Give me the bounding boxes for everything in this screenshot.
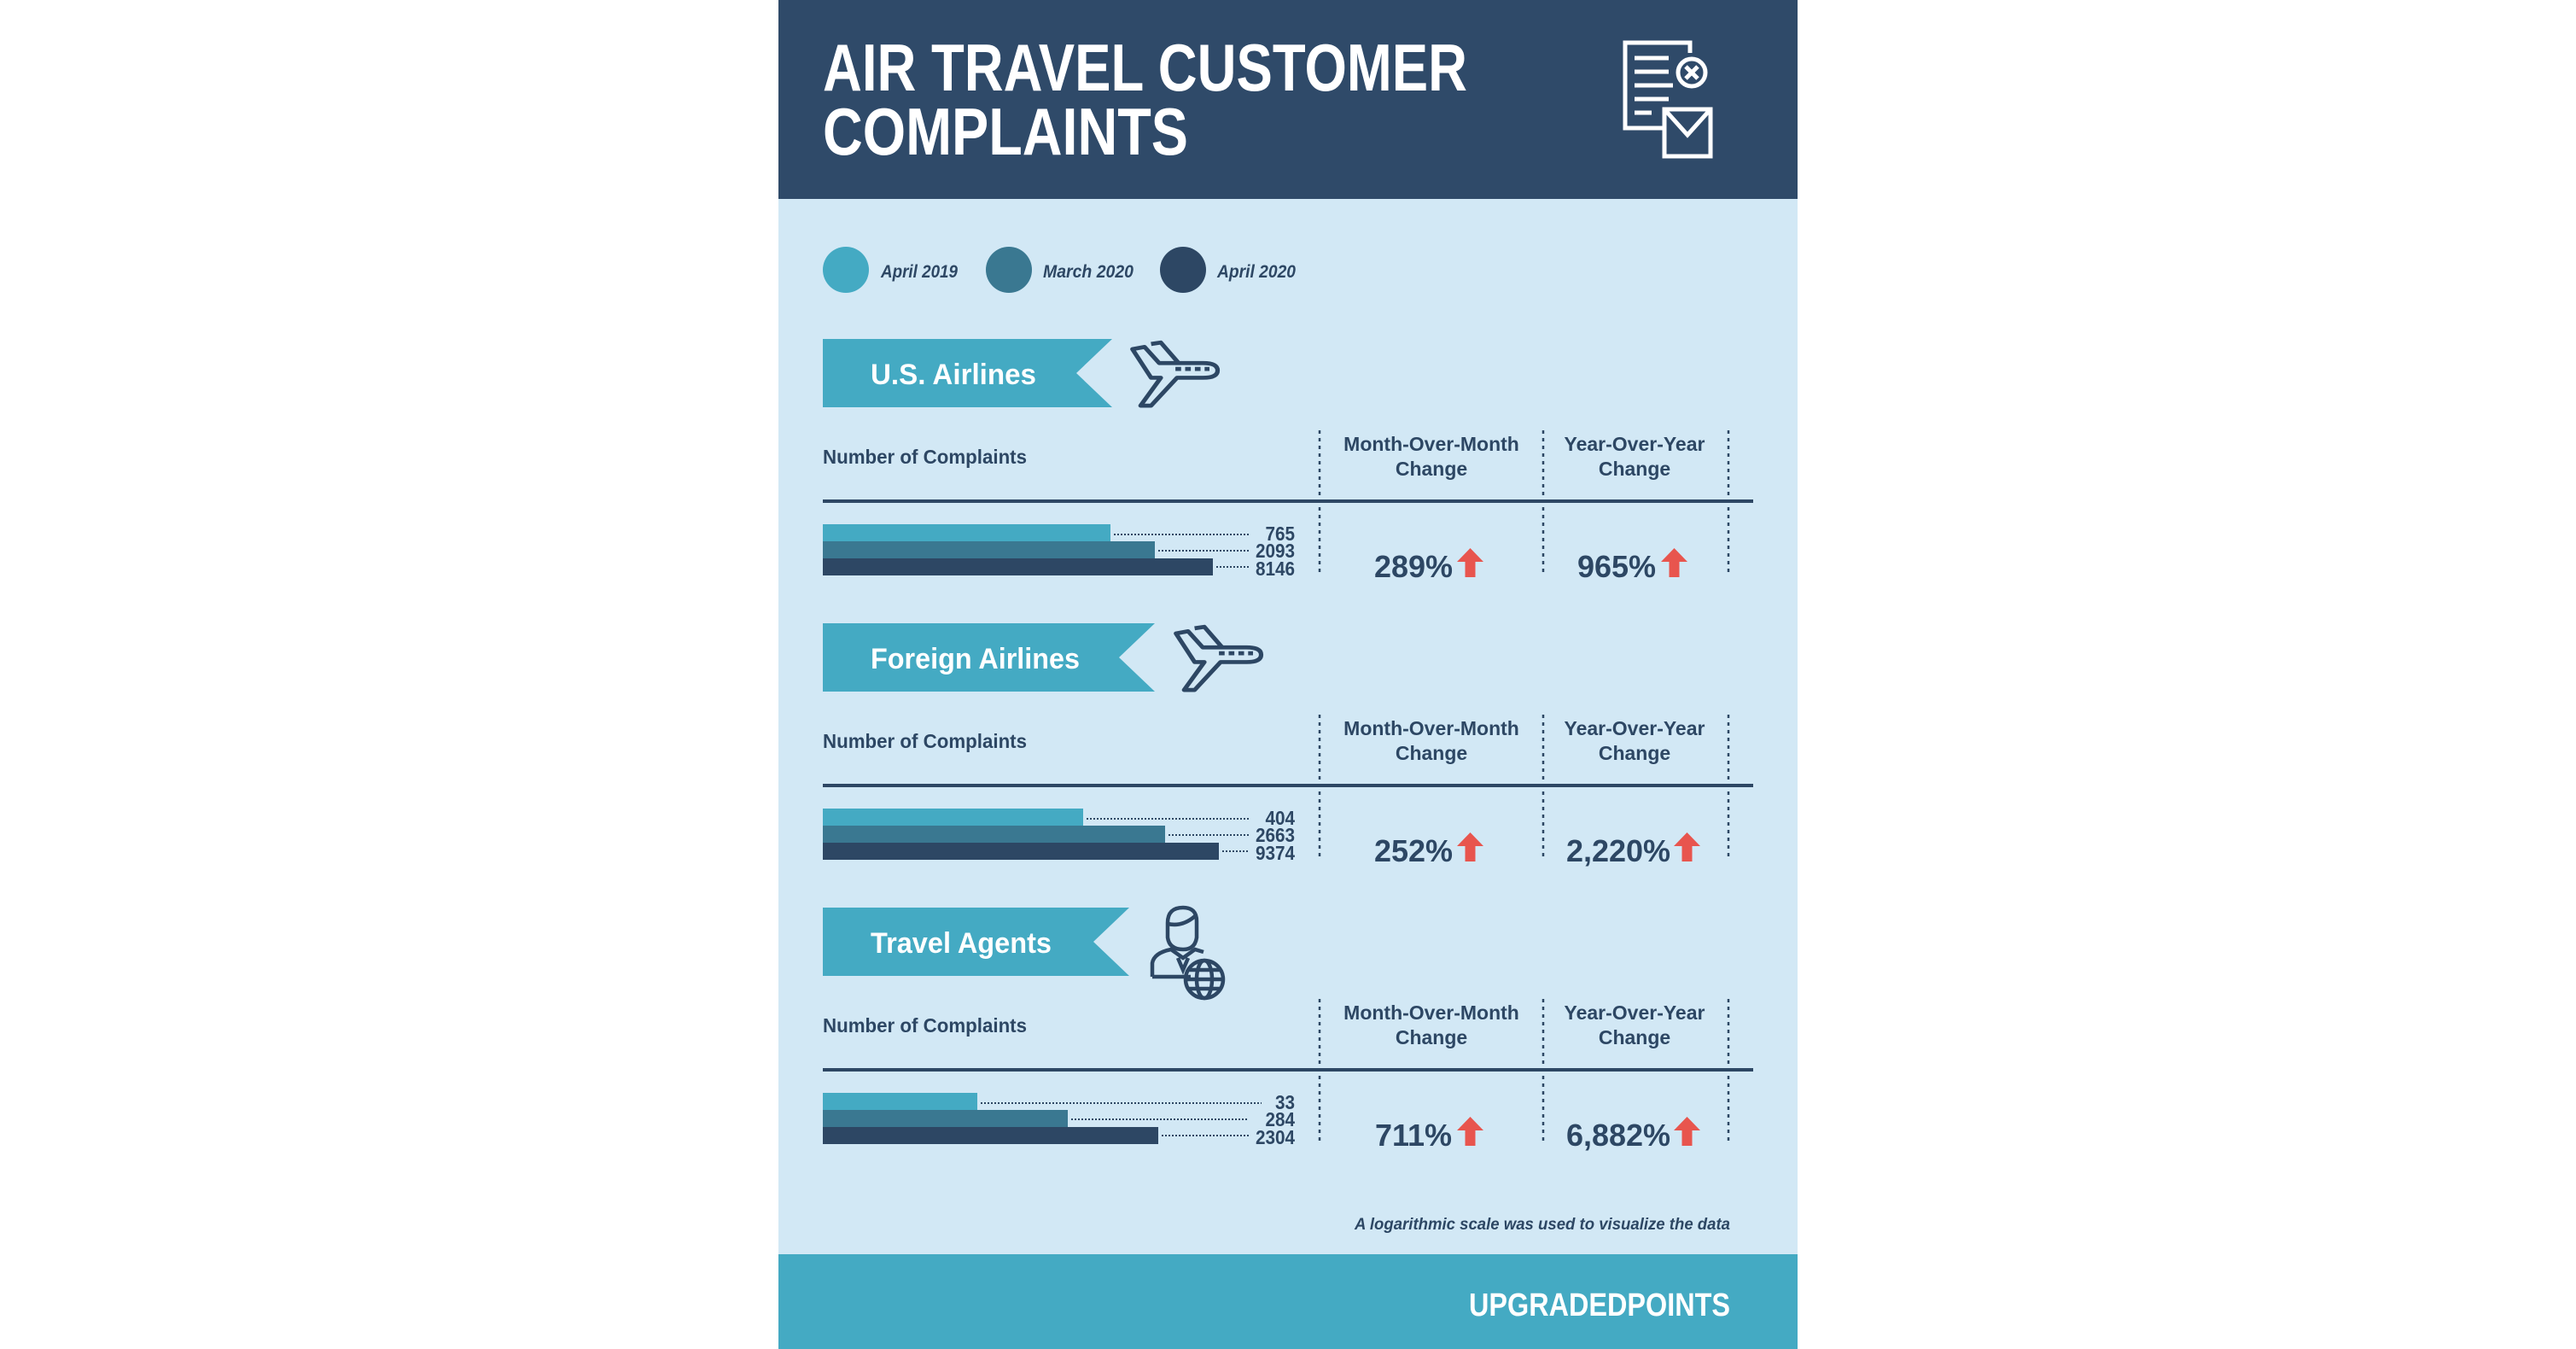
- table headers: Year-Over-Year: [1565, 717, 1705, 739]
- icon: agent with globe: [1152, 908, 1223, 998]
- banner: Foreign Airlines: [871, 643, 1080, 675]
- bar chart: 2663: [1256, 824, 1295, 846]
- table headers: Year-Over-Year: [1565, 1002, 1705, 1024]
- table headers: Month-Over-Month: [1343, 433, 1519, 455]
- table headers: Number of Complaints: [823, 446, 1027, 468]
- table headers: Number of Complaints: [823, 730, 1027, 752]
- bar chart: 765: [1265, 523, 1295, 545]
- background panel: [778, 0, 1798, 1349]
- title: COMPLAINTS: [823, 94, 1188, 169]
- panel: Travel Agents: [823, 908, 1753, 1153]
- footnote: A logarithmic scale was used to visualize the data: [1354, 1216, 1730, 1234]
- table headers: Change: [1396, 742, 1467, 764]
- bar chart: 8146: [1256, 558, 1295, 580]
- bar chart: [823, 807, 1296, 864]
- bar chart: 2304: [1256, 1126, 1296, 1148]
- legend: March 2020: [1043, 262, 1134, 282]
- table headers: [823, 433, 1705, 480]
- banner: [823, 908, 1129, 976]
- table headers: Change: [1396, 1026, 1467, 1048]
- table headers: Change: [1396, 458, 1467, 480]
- table headers: Change: [1599, 1026, 1670, 1048]
- bar chart: 9374: [1256, 842, 1296, 864]
- table headers: Change: [1599, 458, 1670, 480]
- icon: complaint document: [1625, 43, 1711, 156]
- table headers: Month-Over-Month: [1343, 1002, 1519, 1024]
- icon: plane: [1133, 342, 1217, 406]
- footer: [778, 1254, 1798, 1349]
- table headers: Year-Over-Year: [1565, 433, 1705, 455]
- footer: UPGRADEDPOINTS: [1469, 1288, 1730, 1323]
- table headers: Number of Complaints: [823, 1014, 1027, 1037]
- stats: [1374, 832, 1700, 868]
- panel: Foreign Airlines: [823, 623, 1753, 868]
- bar chart: 33: [1275, 1091, 1295, 1113]
- table headers: Month-Over-Month: [1343, 717, 1519, 739]
- banner: Travel Agents: [871, 927, 1052, 960]
- bar chart: [823, 523, 1295, 580]
- stats: 6,882%: [1566, 1118, 1670, 1153]
- icon: plane: [1176, 627, 1262, 690]
- stats: [1374, 548, 1687, 584]
- legend: [823, 247, 1296, 293]
- stats: 289%: [1374, 549, 1453, 584]
- title: AIR TRAVEL CUSTOMER: [823, 30, 1467, 105]
- header: [778, 0, 1798, 199]
- stats: [1375, 1117, 1700, 1153]
- stats: 965%: [1577, 549, 1656, 584]
- bar chart: [823, 1091, 1296, 1148]
- stats: 711%: [1375, 1118, 1452, 1153]
- banner: U.S. Airlines: [871, 359, 1036, 391]
- title: [823, 30, 1467, 169]
- stats: 252%: [1374, 833, 1453, 868]
- banner: [823, 623, 1155, 692]
- bar chart: 284: [1265, 1108, 1296, 1130]
- bar chart: 2093: [1256, 540, 1295, 562]
- banner: [823, 339, 1112, 407]
- stats: 2,220%: [1566, 833, 1670, 868]
- bar chart: 404: [1265, 807, 1296, 829]
- panel: U.S. Airlines: [823, 339, 1753, 584]
- legend: April 2020: [1216, 262, 1296, 282]
- table headers: [823, 717, 1705, 764]
- table headers: Change: [1599, 742, 1670, 764]
- table headers: [823, 1002, 1705, 1048]
- legend: April 2019: [880, 262, 958, 282]
